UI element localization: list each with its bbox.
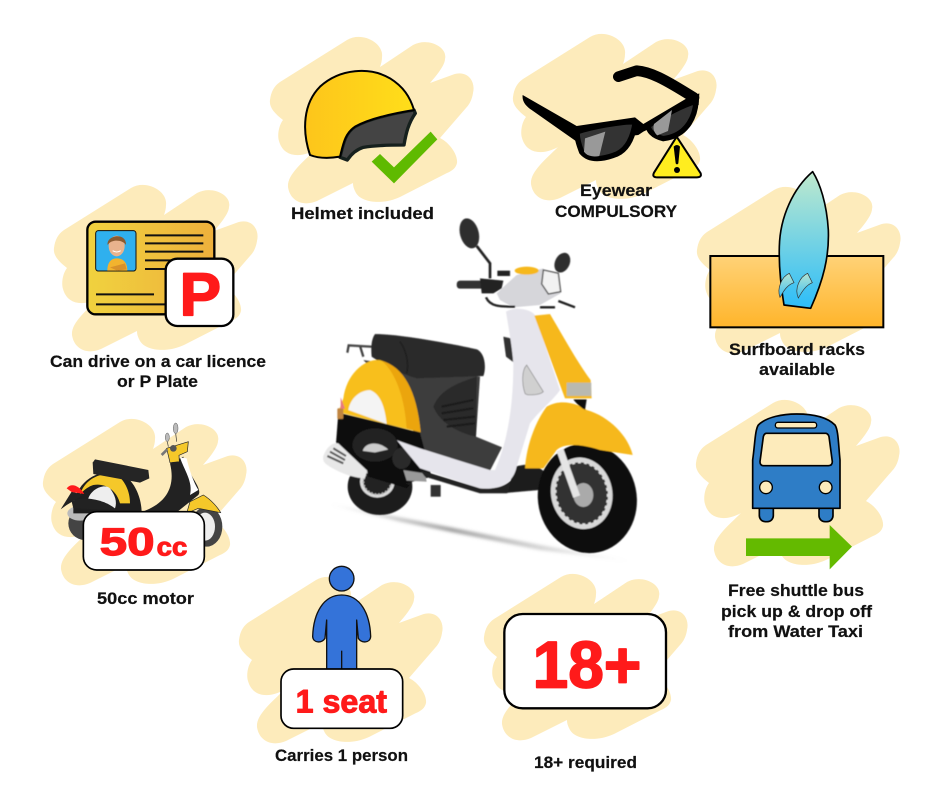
label: free shuttle bus: pick up & drop off bbox=[721, 603, 873, 621]
icon: person with 1 seat badge bbox=[281, 566, 403, 728]
icon: bus bbox=[753, 414, 840, 522]
label: carries 1 person: Carries 1 person bbox=[275, 747, 408, 765]
label: helmet included: Helmet included bbox=[291, 205, 434, 223]
label: surfboard racks bbox=[729, 341, 865, 379]
panel: carries 1 person bbox=[239, 566, 443, 765]
label: 18+ required: 18+ required bbox=[534, 754, 637, 772]
front fender bbox=[525, 402, 633, 468]
label: 50cc motor: 50cc motor bbox=[97, 590, 195, 608]
label: free shuttle bus bbox=[721, 582, 873, 641]
label: car licence or P plate: or P Plate bbox=[117, 373, 198, 391]
label: car licence or P plate bbox=[50, 353, 266, 391]
panel: surfboard racks bbox=[697, 172, 901, 379]
icon: helmet with check mark bbox=[305, 71, 437, 183]
label: surfboard racks: available bbox=[759, 361, 835, 379]
icon: licence card with P plate: P bbox=[180, 261, 221, 328]
panel: free shuttle bus bbox=[696, 400, 900, 641]
label: car licence or P plate: Can drive on a car licence bbox=[50, 353, 266, 371]
icon: person with 1 seat badge: 1 seat bbox=[296, 683, 387, 719]
triangle lamp bbox=[523, 365, 543, 395]
panel: car licence or P plate bbox=[50, 185, 266, 391]
rack bbox=[347, 345, 372, 357]
rear fender bbox=[338, 360, 421, 432]
seat bbox=[371, 334, 485, 378]
icon: 18+ badge bbox=[504, 614, 666, 708]
label: eyewear compulsory: Eyewear bbox=[580, 182, 653, 200]
panel: 50cc motor bbox=[43, 419, 247, 608]
label: eyewear compulsory bbox=[555, 182, 677, 221]
muffler bbox=[323, 443, 367, 478]
rear wheel bbox=[348, 458, 412, 515]
icon: small scooter with 50cc badge: 50 bbox=[100, 520, 155, 564]
panel: helmet included bbox=[270, 37, 474, 223]
scooter photo illustration bbox=[323, 216, 647, 562]
label: free shuttle bus: from Water Taxi bbox=[728, 623, 863, 641]
icon: licence card with P plate bbox=[87, 222, 233, 328]
icon: surfboard and rack bbox=[710, 172, 883, 327]
mirrors bbox=[477, 246, 490, 278]
yellow stripe bbox=[534, 314, 592, 398]
label: surfboard racks: Surfboard racks bbox=[729, 341, 865, 359]
dark under seat body bbox=[363, 360, 502, 471]
label: free shuttle bus: Free shuttle bus bbox=[728, 582, 864, 600]
icon: small scooter with 50cc badge: cc bbox=[157, 531, 187, 561]
panel: 18+ required bbox=[484, 574, 688, 772]
icon: 18+ badge: 18+ bbox=[533, 628, 641, 702]
white floor and front shield bbox=[420, 467, 535, 493]
label: eyewear compulsory: COMPULSORY bbox=[555, 203, 677, 221]
icon: small scooter with 50cc badge bbox=[61, 423, 222, 570]
handlebar and headset bbox=[497, 268, 561, 307]
engine bbox=[336, 413, 432, 485]
arrow: green pointing right bbox=[746, 525, 852, 569]
panel: eyewear compulsory bbox=[513, 34, 717, 221]
front wheel bbox=[528, 434, 647, 562]
icon: sunglasses with warning triangle bbox=[523, 71, 701, 177]
